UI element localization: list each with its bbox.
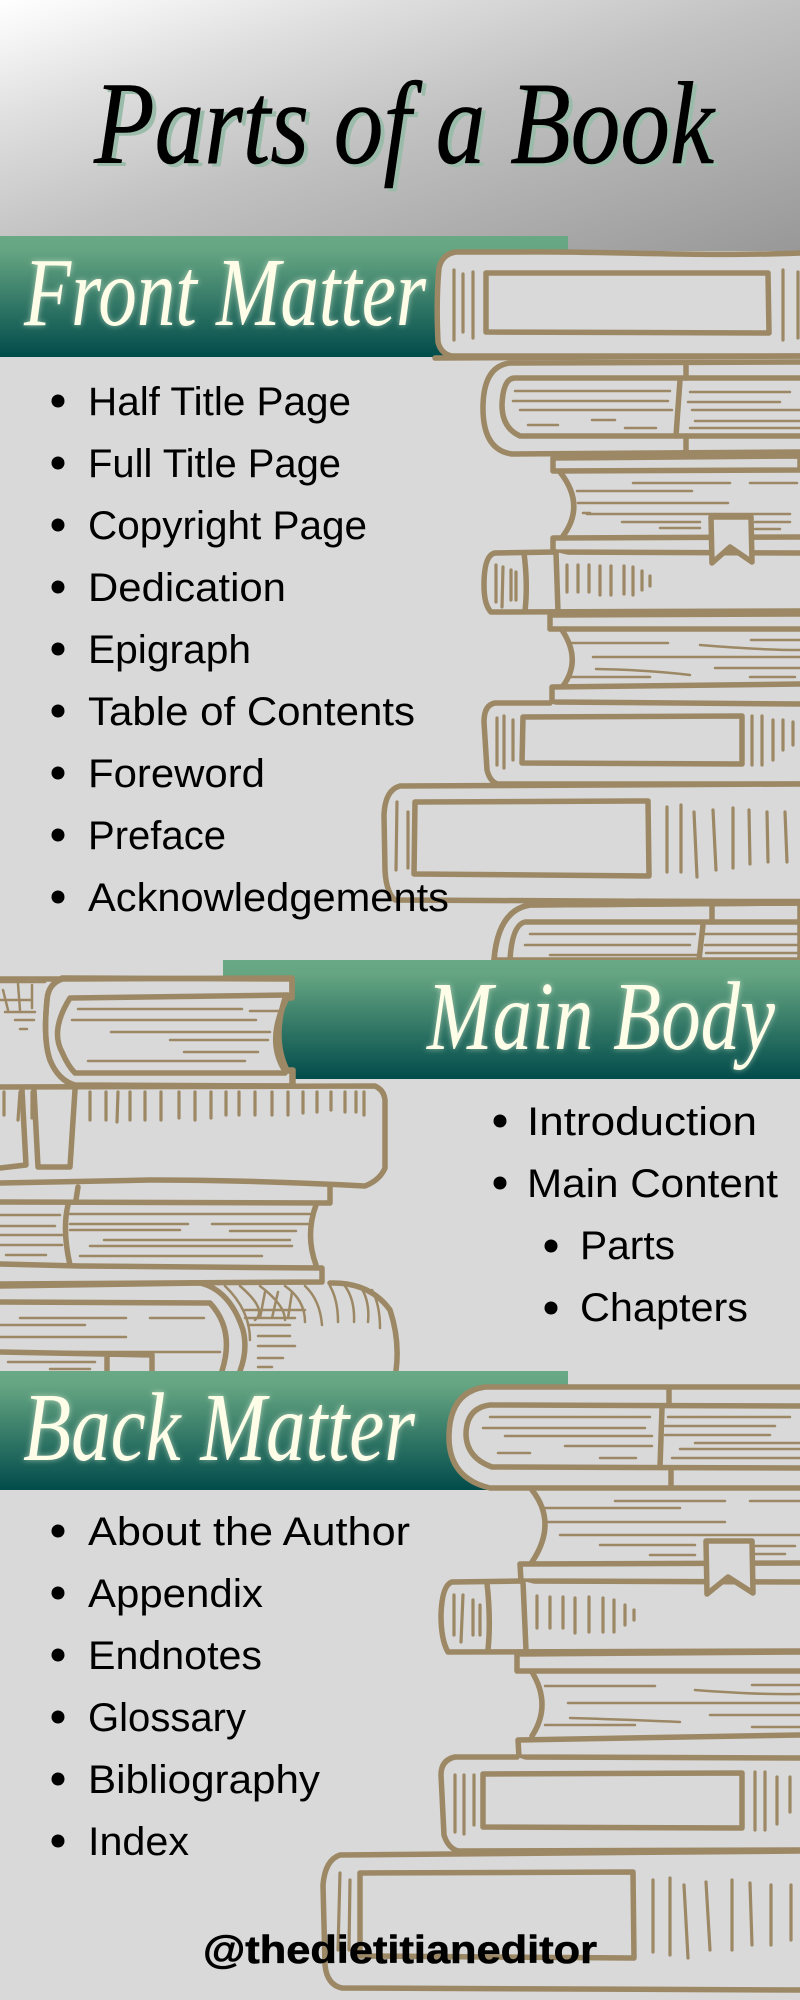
heading: Front Matter: Front Matter bbox=[23, 239, 427, 347]
item text: Full Title Page bbox=[88, 442, 341, 486]
item text: Copyright Page bbox=[88, 504, 367, 548]
item text: Parts bbox=[580, 1224, 675, 1268]
bullets bbox=[52, 1524, 64, 1848]
footer handle: @thedietitianeditor bbox=[203, 1929, 597, 1972]
item text: About the Author bbox=[88, 1510, 410, 1554]
book: page block bbox=[517, 1652, 800, 1758]
item text: Main Content bbox=[527, 1162, 778, 1206]
illustration: top book stack bbox=[382, 252, 800, 960]
header gradient band bbox=[0, 0, 800, 251]
item text: Foreword bbox=[88, 752, 265, 796]
bullets bbox=[494, 1114, 558, 1314]
book: page block with bookmark bbox=[553, 456, 800, 563]
illustration: bottom book stack bbox=[323, 1387, 800, 1990]
book: spine with band bbox=[441, 1581, 800, 1652]
heading: Front Matter: Front Matter bbox=[23, 239, 427, 347]
book: page block with bookmark bbox=[520, 1490, 800, 1594]
book: bottom book with curved spine bbox=[0, 1283, 397, 1371]
item text: Chapters bbox=[580, 1286, 748, 1330]
book: upper open-edge book bbox=[0, 978, 293, 1086]
book: page block bbox=[550, 614, 800, 704]
item text: Table of Contents bbox=[88, 690, 415, 734]
item text bbox=[88, 1510, 410, 1864]
banner: Back Matter bbox=[0, 1371, 568, 1490]
list: front matter items bbox=[52, 380, 449, 920]
item text: Acknowledgements bbox=[88, 876, 449, 920]
book: closed book with label bbox=[435, 252, 800, 358]
item text bbox=[527, 1100, 778, 1330]
book: open-edge book bbox=[483, 362, 800, 454]
banner: Front Matter bbox=[0, 236, 568, 357]
item text bbox=[88, 380, 449, 920]
list: main body items bbox=[494, 1100, 778, 1330]
book: wide spine with ticks bbox=[0, 1086, 385, 1186]
item text: Bibliography bbox=[88, 1758, 320, 1802]
item text: Glossary bbox=[88, 1696, 246, 1740]
list: back matter items bbox=[52, 1510, 410, 1864]
item text: Index bbox=[88, 1820, 189, 1864]
item text: Dedication bbox=[88, 566, 286, 610]
item text: Introduction bbox=[527, 1100, 757, 1144]
item text: Endnotes bbox=[88, 1634, 262, 1678]
book: open-edge book bbox=[449, 1387, 800, 1488]
book: large spine with label bbox=[384, 784, 800, 902]
book: spine with band bbox=[484, 552, 800, 612]
book: large spine with label bbox=[323, 1851, 800, 1990]
heading: Back Matter: Back Matter bbox=[23, 1374, 416, 1482]
item text: Epigraph bbox=[88, 628, 251, 672]
item text: Appendix bbox=[88, 1572, 263, 1616]
banner: Main Body bbox=[223, 960, 800, 1079]
illustration: middle book stack bbox=[0, 978, 397, 1371]
book: page block bbox=[0, 1185, 330, 1284]
item text: Half Title Page bbox=[88, 380, 351, 424]
bullets bbox=[52, 394, 64, 904]
book: spine with label bbox=[484, 703, 800, 784]
heading: Back Matter: Back Matter bbox=[23, 1374, 416, 1482]
book: bottom open-edge book bbox=[382, 900, 800, 960]
book: spine with label bbox=[441, 1757, 800, 1851]
item text: Preface bbox=[88, 814, 226, 858]
